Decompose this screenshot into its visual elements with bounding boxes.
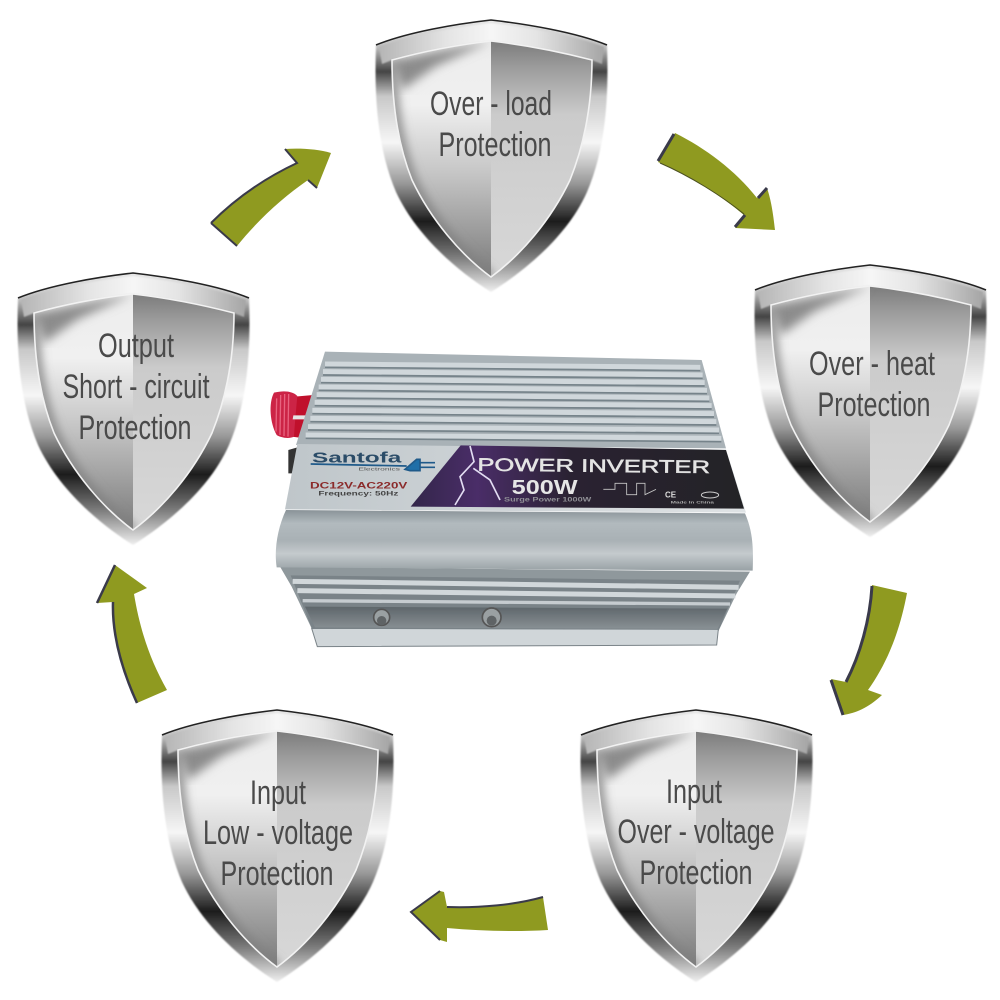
- lower fins: [291, 575, 740, 633]
- shield: Input Over-voltage Protection: [581, 710, 812, 982]
- label: Output Short-circuit Protection: Protection: [78, 409, 192, 447]
- label plate: [285, 444, 746, 513]
- label: Input Over-voltage Protection: Input: [666, 773, 722, 811]
- label plate: CE: [665, 490, 677, 499]
- curved front housing: [276, 510, 753, 571]
- label plate: POWER INVERTER: [477, 455, 710, 477]
- screw left: [374, 609, 390, 625]
- top surface with fins: [296, 352, 726, 448]
- arrow: right: [831, 585, 907, 715]
- bottom lip: [312, 628, 718, 647]
- label: Input Low-voltage Protection: Protection: [220, 855, 334, 893]
- label plate: Surge Power 1000W: [504, 496, 591, 503]
- label: Output Short-circuit Protection: Output: [98, 327, 174, 365]
- terminal: red knob: [271, 391, 313, 473]
- arrow: left: [97, 565, 167, 703]
- label: Output Short-circuit Protection: Short - circuit: [62, 368, 210, 406]
- shield: Output Short-circuit Protection: [18, 273, 249, 545]
- label: Over-load Protection: Protection: [438, 126, 552, 164]
- label plate: Electronics: [358, 467, 401, 472]
- label: Input Low-voltage Protection: Low - voltage: [203, 814, 353, 852]
- body side behind housing: [280, 567, 750, 633]
- brand name: Santofa: [312, 451, 403, 467]
- icon: plug: [311, 459, 435, 471]
- inverter illustration: [271, 352, 753, 647]
- label plate: DC12V-AC220V: [310, 481, 407, 491]
- label: Over-heat Protection: Protection: [818, 386, 930, 424]
- label: Over-heat Protection: Over - heat: [809, 345, 935, 383]
- label: Input Over-voltage Protection: Over - voltage: [618, 813, 774, 851]
- shield: Input Low-voltage Protection: [162, 710, 393, 982]
- label plate: Made In China: [671, 499, 715, 504]
- label: Input Low-voltage Protection: Input: [250, 774, 306, 812]
- shield: Over-heat Protection: [755, 265, 986, 537]
- arrow: bottom: [411, 891, 548, 942]
- label: Over-load Protection: Over - load: [430, 85, 552, 123]
- shield: Over-load Protection: [376, 20, 607, 292]
- icon: square wave: [603, 483, 656, 495]
- label: Input Over-voltage Protection: Protection: [640, 854, 752, 892]
- arrow: top left: [211, 149, 331, 246]
- label plate: 500W: [512, 477, 578, 499]
- label plate: Frequency: 50Hz: [318, 490, 398, 497]
- icon: lightning bolt: [455, 446, 500, 505]
- arrow: top right: [658, 133, 775, 230]
- screw right: [482, 608, 501, 627]
